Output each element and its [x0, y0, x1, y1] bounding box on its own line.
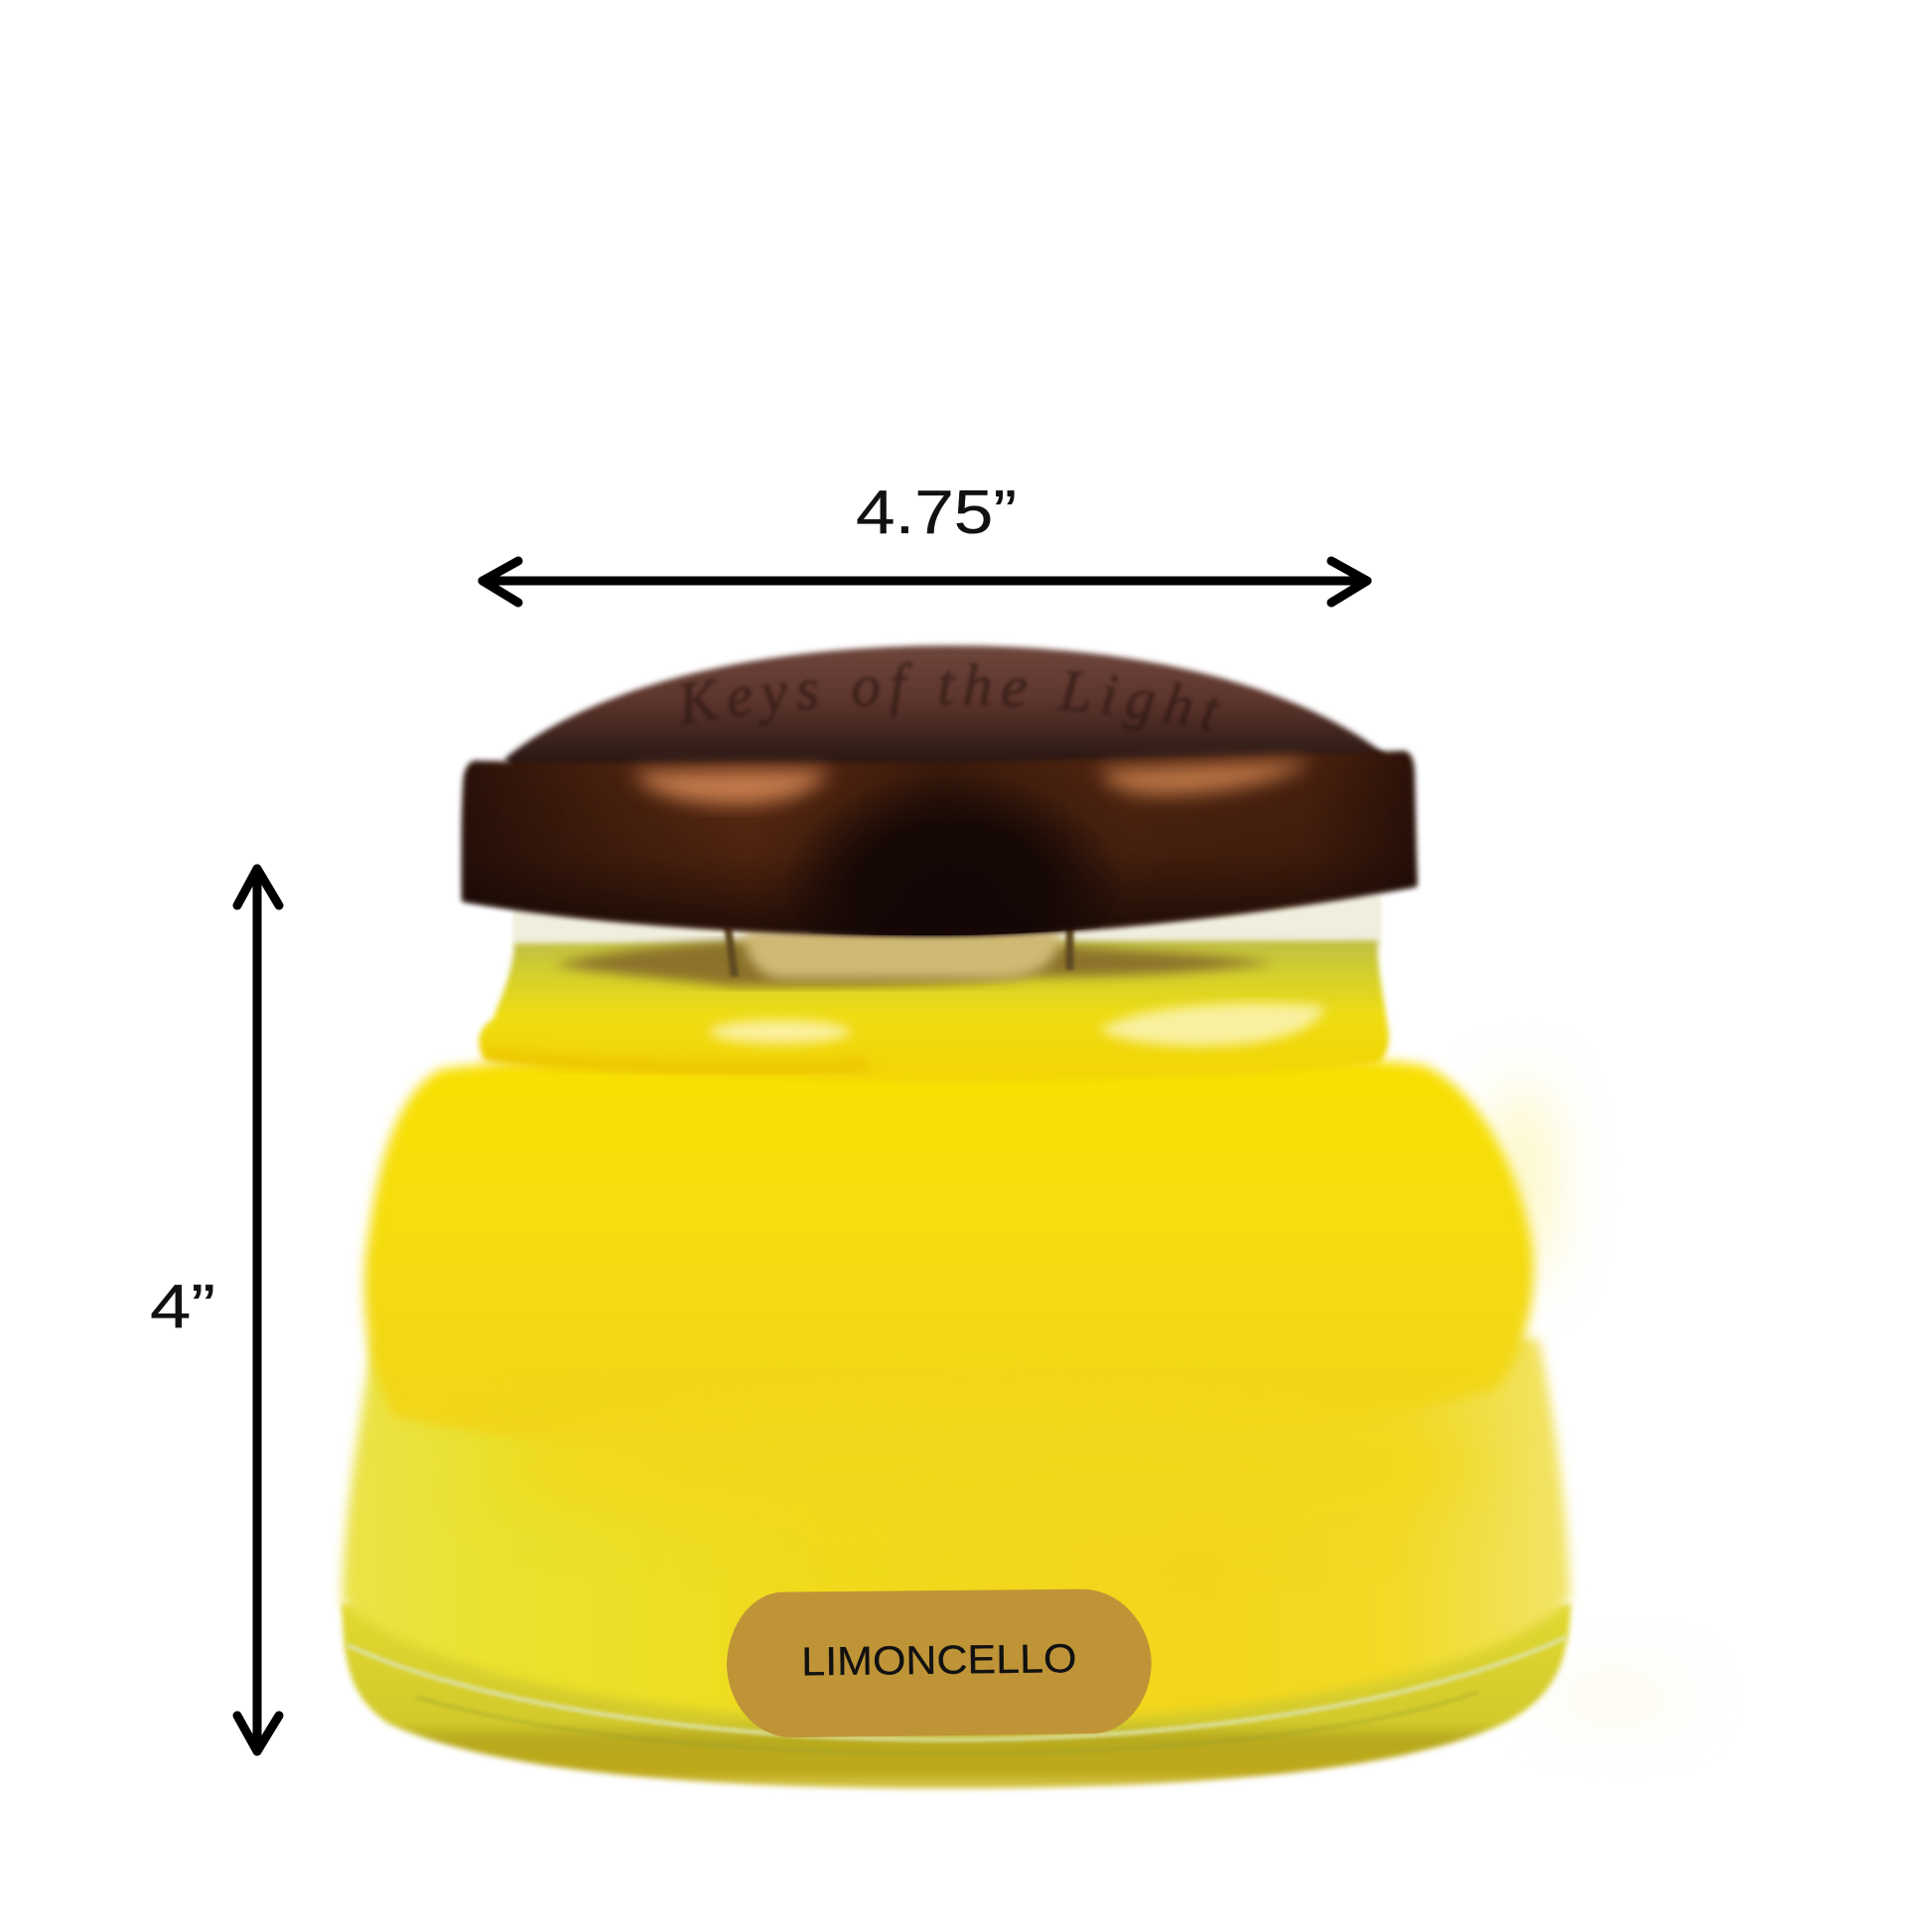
wax blend [494, 1403, 1477, 1530]
candle jar [334, 641, 1663, 1793]
lid dome [504, 645, 1386, 783]
lid engraving: Keys of the Light [681, 661, 1221, 731]
lid highlights [632, 760, 1311, 804]
lower wax body [343, 1338, 1570, 1724]
neck glass band [512, 897, 1381, 950]
width label: 4.75” [856, 479, 1017, 547]
halo behind wax [1496, 1083, 1684, 1709]
label text: LIMONCELLO [801, 1635, 1077, 1684]
neck wax [479, 940, 1389, 1081]
jar glass base [342, 1604, 1571, 1789]
lid band [462, 751, 1417, 935]
wicks [728, 925, 1070, 977]
glass rim highlight [347, 1637, 1566, 1739]
wick pool [554, 940, 1273, 987]
width arrow [483, 561, 1367, 603]
height label: 4” [150, 1273, 215, 1341]
height arrow [237, 869, 279, 1751]
wax highlights [484, 1003, 1325, 1068]
label [727, 1589, 1152, 1737]
lid dark reflection [798, 785, 1104, 935]
upper wax body [364, 1049, 1534, 1456]
lid [457, 641, 1422, 941]
